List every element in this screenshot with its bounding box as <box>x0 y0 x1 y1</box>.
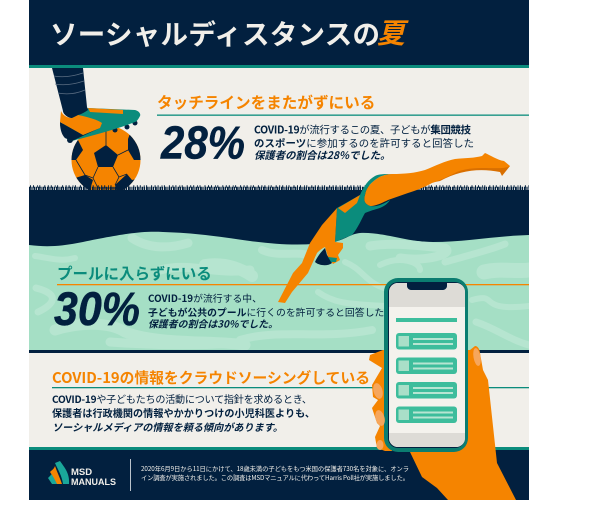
footer top stripe <box>29 447 529 450</box>
text block: footnote <box>141 466 408 482</box>
stat: 28%: 28% <box>160 116 245 168</box>
text block: crowdsourcing: 保護者は行政機関の情報やかかりつけの小児科医よりも、 <box>52 405 315 420</box>
stat: 30%: 30% <box>54 282 140 335</box>
text block: soccer: のスポーツに参加するのを許可すると回答した <box>254 135 474 150</box>
heading: pool: プールに入らずにいる <box>57 262 212 284</box>
text block: pool: COVID-19が流行する中、 <box>148 291 262 305</box>
icon: smartphone <box>384 278 468 452</box>
logo: MSD Manuals: MANUALS <box>71 477 116 488</box>
title accent: 夏 <box>377 12 409 52</box>
text block: pool: 保護者の割合は30%でした。 <box>148 316 278 330</box>
panel: pool water <box>29 232 529 350</box>
footer divider <box>130 459 131 491</box>
rule <box>52 387 529 388</box>
panel: soccer section background <box>29 68 529 192</box>
title: ソーシャルディスタンスの <box>50 12 380 52</box>
heading: crowdsourcing: COVID-19の情報をクラウドソーシングしている <box>52 367 370 388</box>
panel: navy band <box>29 190 529 250</box>
text block: pool <box>148 294 384 328</box>
illustration: diver <box>278 153 510 303</box>
text block: crowdsourcing: COVID-19や子どもたちの活動について指針を求めるとき、 <box>52 391 312 406</box>
text block: pool: 子どもが公共のプールに行くのを許可すると回答した <box>148 305 384 319</box>
grass edge <box>29 186 529 188</box>
text block: crowdsourcing: ソーシャルメディアの情報を頼る傾向があります。 <box>52 419 283 434</box>
panel: crowdsourcing section background <box>29 353 529 447</box>
illustration: hand holding phone <box>369 346 516 500</box>
icon: fingernails <box>372 348 482 450</box>
panel: footer <box>29 447 529 500</box>
rule <box>157 114 529 116</box>
text block: footnote: 2020年6月9日から11日にかけて、18歳未満の子どもをもつ米国の保護者730名を対象に、オンラ <box>141 464 409 473</box>
panel: header <box>29 0 529 68</box>
icon: soccer player's leg and boot <box>52 68 140 143</box>
divider bar <box>29 350 529 353</box>
logo: MSD Manuals <box>48 461 116 485</box>
text block: footnote: イン調査が実施されました。この調査はMSDマニュアルに代わってHarris Poll社が実施しました。 <box>141 473 409 482</box>
text block: soccer: COVID-19が流行するこの夏、子どもが集団競技 <box>254 122 472 136</box>
logo: MSD Manuals: MSD <box>71 467 92 478</box>
text block: soccer: 保護者の割合は28%でした。 <box>254 147 391 162</box>
text block: soccer <box>254 124 474 160</box>
text block: crowdsourcing <box>52 394 308 432</box>
icon: soccer ball <box>72 128 140 190</box>
rule <box>57 284 529 285</box>
heading: touchline: タッチラインをまたがずにいる <box>157 91 375 113</box>
